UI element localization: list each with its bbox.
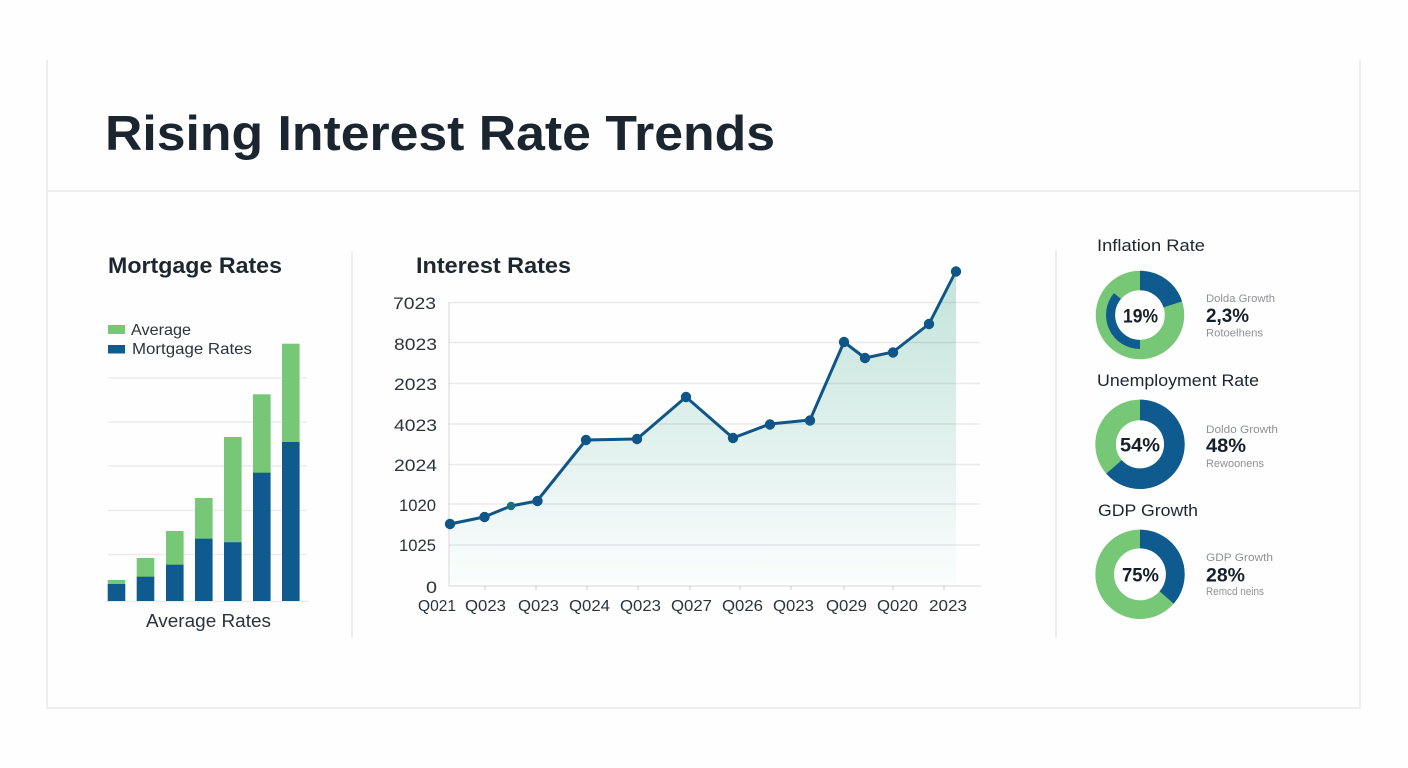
stat: gdp: [1206, 552, 1273, 598]
stat: unemployment: Rewoonens: [1206, 458, 1264, 470]
x axis labels: Q023: [465, 598, 506, 615]
stat: inflation: Rotoelhens: [1206, 328, 1264, 340]
heading: interest rates: Interest Rates: [416, 253, 571, 278]
y axis labels: 8023: [394, 336, 437, 354]
panel: gdp growth: [1098, 501, 1273, 610]
panel: mortgage rates: [105, 253, 309, 631]
line series: [445, 266, 961, 529]
heading: gdp growth: GDP Growth: [1098, 501, 1198, 520]
x axis labels: Q027: [671, 598, 712, 615]
panel: unemployment rate: [1097, 371, 1278, 479]
stat: gdp: 28%: [1206, 566, 1245, 586]
axis caption: Average Rates: [146, 610, 271, 631]
donut: unemployment: 54%: [1120, 435, 1160, 457]
stat: unemployment: [1206, 424, 1278, 470]
heading: mortgage rates: Mortgage Rates: [108, 253, 282, 278]
donut: inflation: [1106, 280, 1174, 350]
y axis labels: 2024: [394, 457, 437, 475]
y axis labels: [393, 295, 437, 597]
stat: inflation: 2,3%: [1206, 306, 1249, 327]
x axis labels: Q029: [826, 598, 867, 615]
x axis labels: Q023: [620, 598, 661, 615]
x axis labels: Q021: [418, 598, 456, 615]
x axis labels: Q020: [877, 598, 918, 615]
x axis labels: Q023: [773, 598, 814, 615]
legend: [108, 322, 252, 358]
x axis labels: Q023: [518, 598, 559, 615]
donut: inflation: 19%: [1123, 306, 1158, 328]
grid lines: [449, 302, 981, 590]
donut: unemployment: [1106, 410, 1174, 479]
stacked bar chart: [105, 344, 309, 602]
y axis labels: 4023: [394, 417, 437, 435]
donut: gdp: [1105, 539, 1175, 610]
x axis labels: 2023: [929, 598, 967, 615]
legend: Average: [131, 322, 191, 339]
panel: interest rates: [393, 253, 981, 615]
x axis labels: [418, 598, 967, 615]
stat: inflation: Dolda Growth: [1206, 293, 1275, 305]
stat: gdp: GDP Growth: [1206, 552, 1273, 564]
heading: inflation rate: Inflation Rate: [1097, 236, 1205, 255]
y axis labels: 2023: [394, 376, 437, 394]
title: Rising Interest Rate Trends: [105, 107, 775, 161]
stat: inflation: [1206, 293, 1275, 340]
x axis labels: Q026: [722, 598, 763, 615]
y axis labels: 0: [426, 579, 437, 597]
y axis labels: 1020: [399, 497, 436, 515]
stat: unemployment: 48%: [1206, 436, 1246, 457]
area under line: [450, 271, 956, 585]
heading: unemployment rate: Unemployment Rate: [1097, 371, 1259, 390]
x axis labels: Q024: [569, 598, 610, 615]
y axis labels: 7023: [393, 295, 436, 313]
panel: inflation rate: [1097, 236, 1275, 350]
y axis labels: 1025: [399, 537, 436, 555]
donut: gdp: 75%: [1122, 565, 1159, 587]
stat: unemployment: Doldo Growth: [1206, 424, 1278, 436]
stat: gdp: Remcd neins: [1206, 586, 1264, 598]
legend: Mortgage Rates: [132, 341, 252, 358]
card frame: [47, 60, 1360, 708]
